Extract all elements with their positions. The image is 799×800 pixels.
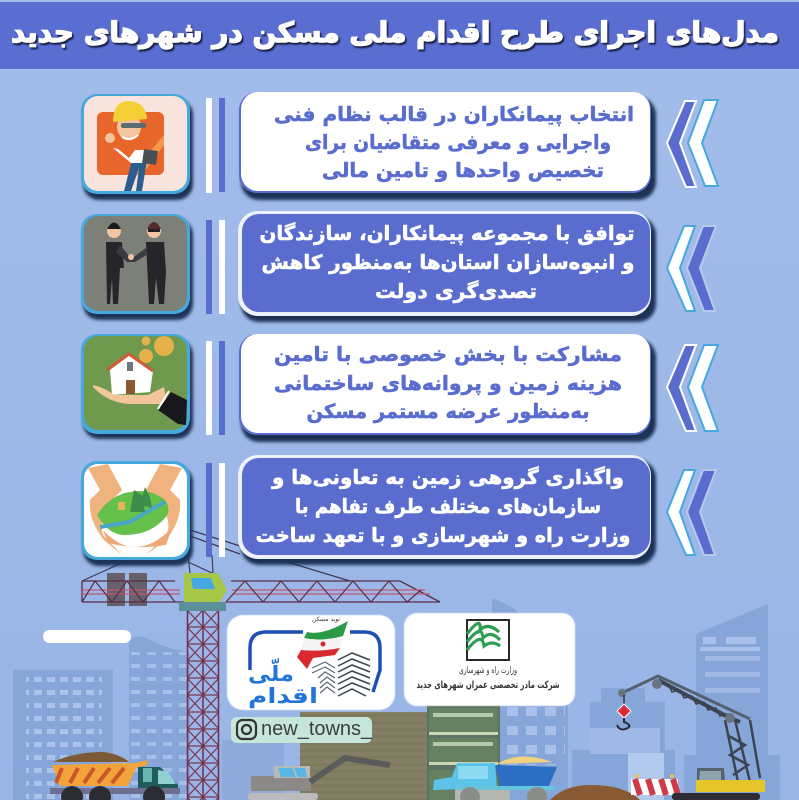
panel: land assignment [238, 455, 656, 565]
text block [274, 103, 634, 182]
arrows: double chevron [667, 470, 716, 555]
header bar [0, 2, 799, 69]
text block: واجرایی و معرفی متقاضیان برای [305, 131, 611, 154]
instagram handle [231, 717, 373, 743]
card: new towns company logo: وزارت راه و شهرسازی [459, 666, 517, 676]
divider bars [206, 98, 225, 193]
divider bars [206, 341, 225, 435]
icon: house on hand [81, 334, 193, 439]
panel: agreement [238, 211, 656, 322]
striped barrier [631, 774, 678, 795]
card: national housing action logo [227, 615, 395, 710]
text block: انتخاب پیمانکاران در قالب نظام فنی [274, 103, 634, 126]
text block [256, 466, 630, 547]
text block: به‌منظور عرضه مستمر مسکن [306, 400, 590, 423]
building under construction [300, 705, 500, 800]
arrows: double chevron [667, 226, 716, 311]
icon: handshake [81, 214, 193, 320]
text block [274, 343, 622, 423]
panel: private sector [239, 334, 656, 442]
text block: تصدی‌گری دولت [375, 280, 537, 303]
text block: سازمان‌های مختلف طرف تفاهم با [295, 495, 601, 518]
text block: واگذاری گروهی زمین به تعاونی‌ها و [271, 466, 624, 489]
arrows: double chevron [667, 100, 718, 187]
tower crane [82, 530, 440, 800]
text block: توافق با مجموعه پیمانکاران، سازندگان [260, 222, 634, 245]
text block: تخصیص واحدها و تامین مالی [322, 159, 604, 182]
orange dump truck [50, 752, 180, 800]
icon: engineer [81, 94, 193, 200]
card: national housing action logo: نوید مسکن [312, 616, 340, 623]
city skyline background [13, 598, 780, 800]
instagram handle: new_towns_ [261, 718, 373, 740]
card: national housing action logo: ملّی [248, 657, 294, 686]
flag [297, 621, 348, 669]
card: new towns company logo [404, 613, 575, 706]
text block: هزینه زمین و پروانه‌های ساختمانی [274, 372, 622, 395]
arrows: double chevron [667, 345, 718, 431]
row 1 [81, 92, 718, 200]
blue dump truck [433, 756, 557, 800]
row 4 [81, 455, 716, 566]
text block: وزارت راه و شهرسازی و با تعهد ساخت [256, 524, 630, 547]
icon: instagram [237, 720, 256, 739]
divider bars [206, 463, 225, 557]
row 3 [81, 334, 718, 442]
icon: land in hands [81, 461, 193, 566]
panel: contractor selection [239, 92, 656, 200]
title: مدل‌های اجرای طرح اقدام ملی مسکن در شهرهای جدید [11, 16, 779, 49]
card: national housing action logo: اقدام [248, 684, 318, 708]
text block [260, 222, 634, 303]
divider bars [206, 220, 225, 314]
row 2 [81, 211, 716, 322]
mobile crane [617, 676, 765, 800]
card: new towns company logo: شرکت مادر تخصصی عمران شهرهای جدید [416, 680, 560, 691]
white cloud [43, 630, 131, 643]
dirt mound [550, 785, 640, 800]
excavator [248, 758, 390, 800]
text block: و انبوه‌سازان استان‌ها به‌منظور کاهش [262, 251, 634, 274]
text block: مشارکت با بخش خصوصی با تامین [274, 343, 622, 366]
